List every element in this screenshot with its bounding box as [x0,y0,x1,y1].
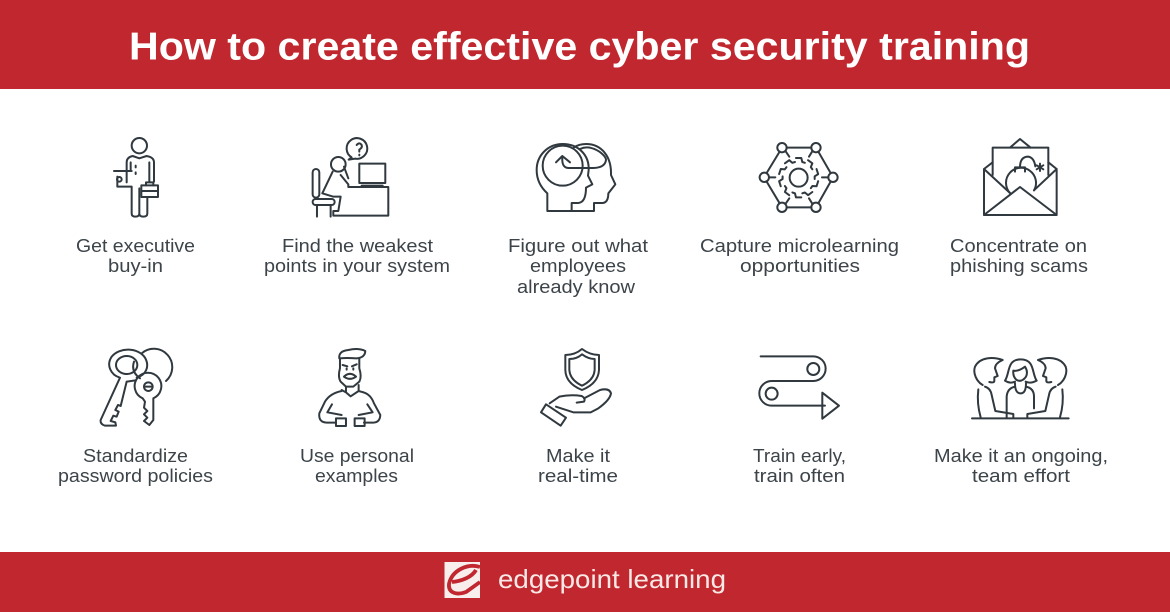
icon: two heads with clock [537,144,615,211]
label: capture microlearning opportunities [700,235,899,276]
label: make it real-time: real-time [538,465,618,486]
label: figure out what employees already know: Figure out what [508,235,648,256]
icon: hand holding shield [541,349,611,426]
icon: person at desk with question [313,138,388,217]
label: make it an ongoing team effort [934,445,1108,486]
label: get executive buy-in [76,235,195,276]
header band [0,0,1170,89]
label: standardize password policies: Standardize [83,445,188,466]
label: train early, train often: train often [754,465,845,486]
icon: executive with briefcase [114,138,158,217]
label: capture microlearning opportunities: Capture microlearning [700,235,899,256]
label: make it real-time [538,445,618,486]
label: use personal examples: Use personal [300,445,414,466]
label: find the weakest points: Find the weakest [282,235,433,256]
label: make it an ongoing team effort: Make it an ongoing, [934,445,1108,466]
label: get executive buy-in: Get executive [76,235,195,256]
icon: team of three [972,358,1069,418]
icon: keys [101,349,172,426]
icon: envelope with bomb [984,139,1057,215]
label: use personal examples: examples [315,465,398,486]
label: standardize password policies: password policies [58,465,213,486]
label: train early, train often [753,445,846,486]
label: train early, train often: Train early, [753,445,846,466]
label: make it an ongoing team effort: team effort [972,465,1070,486]
label: find the weakest points: points in your system [264,255,450,276]
icon: bearded man [319,349,380,426]
label: figure out what employees already know: employees [530,255,626,276]
label: use personal examples [300,445,414,486]
label: make it real-time: Make it [546,445,610,466]
label: figure out what employees already know [508,235,648,297]
label: capture microlearning opportunities: opportunities [740,255,860,276]
label: standardize password policies [58,445,213,486]
icon: edgepoint logo [444,562,480,598]
label: concentrate on phishing scams: phishing scams [950,255,1088,276]
label: concentrate on phishing scams [950,235,1088,276]
footer band [0,552,1170,612]
label: figure out what employees already know: already know [517,276,636,297]
icon: winding path with arrow [759,356,839,419]
label: find the weakest points [264,235,450,276]
label: concentrate on phishing scams: Concentrate on [950,235,1087,256]
icon: gear network [760,143,838,212]
label: get executive buy-in: buy-in [108,255,163,276]
brand name: edgepoint learning [498,564,726,594]
title: How to create effective cyber security training [129,26,1030,68]
